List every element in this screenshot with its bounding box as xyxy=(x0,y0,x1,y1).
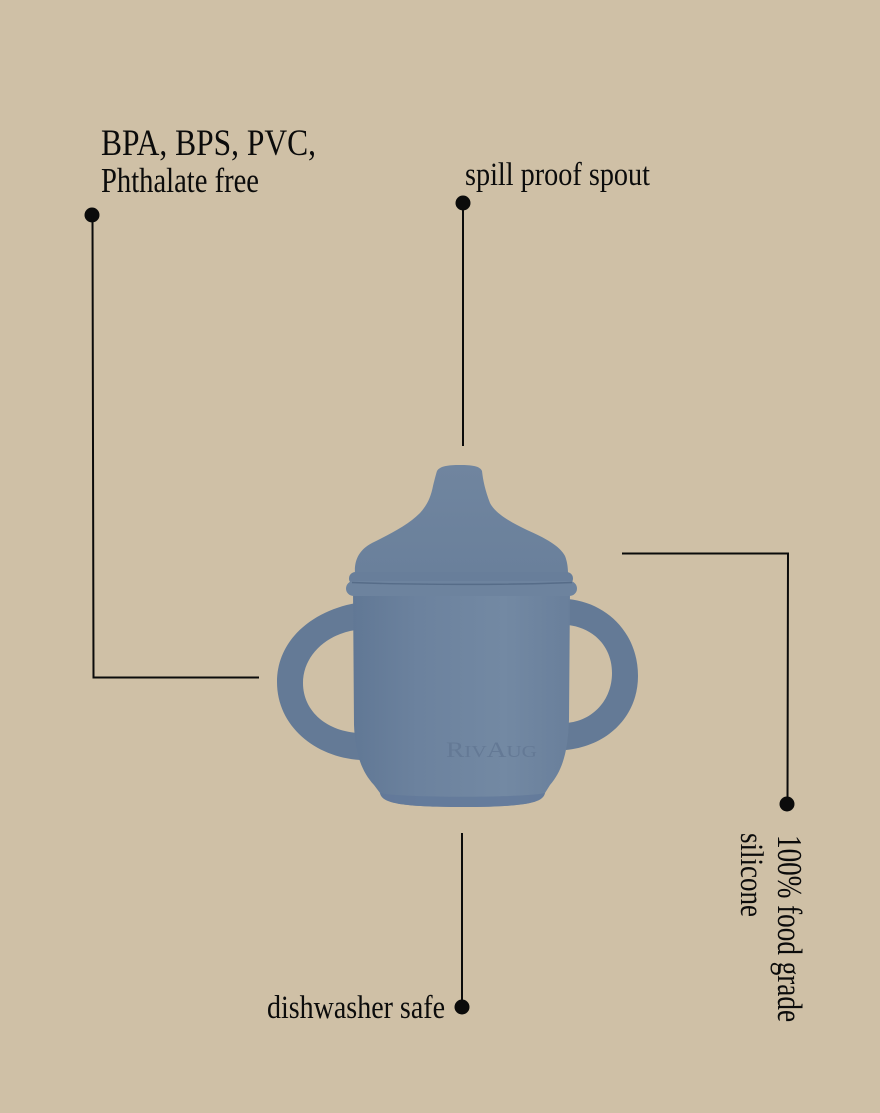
callout line: food grade silicone xyxy=(622,554,794,812)
cup foot xyxy=(380,793,545,807)
label: 100% food grade silicone xyxy=(733,833,809,1022)
rim gap shadow xyxy=(352,582,572,584)
label: 100% food grade silicone: 100% food grade xyxy=(770,835,809,1022)
label: dishwasher safe: dishwasher safe xyxy=(267,990,445,1026)
callout line: BPA free xyxy=(84,208,259,678)
label: spill proof spout: spill proof spout xyxy=(465,157,650,193)
label: BPA, BPS, PVC, Phthalate free: BPA, BPS, PVC, xyxy=(101,123,316,164)
product: sippy cup xyxy=(277,465,638,807)
callout line: spout xyxy=(456,196,470,446)
callout line: dishwasher xyxy=(454,833,470,1014)
cup right handle xyxy=(566,599,638,750)
label: BPA, BPS, PVC, Phthalate free xyxy=(101,123,316,200)
label: 100% food grade silicone: silicone xyxy=(733,833,769,917)
cup rim xyxy=(346,581,577,596)
cup body xyxy=(353,590,570,807)
label: BPA, BPS, PVC, Phthalate free: Phthalate free xyxy=(101,161,259,200)
lid rim xyxy=(349,572,573,585)
embossed brand name: RIVAUG xyxy=(446,737,537,762)
cup left handle xyxy=(277,603,360,760)
cup lid with spout xyxy=(355,465,568,574)
